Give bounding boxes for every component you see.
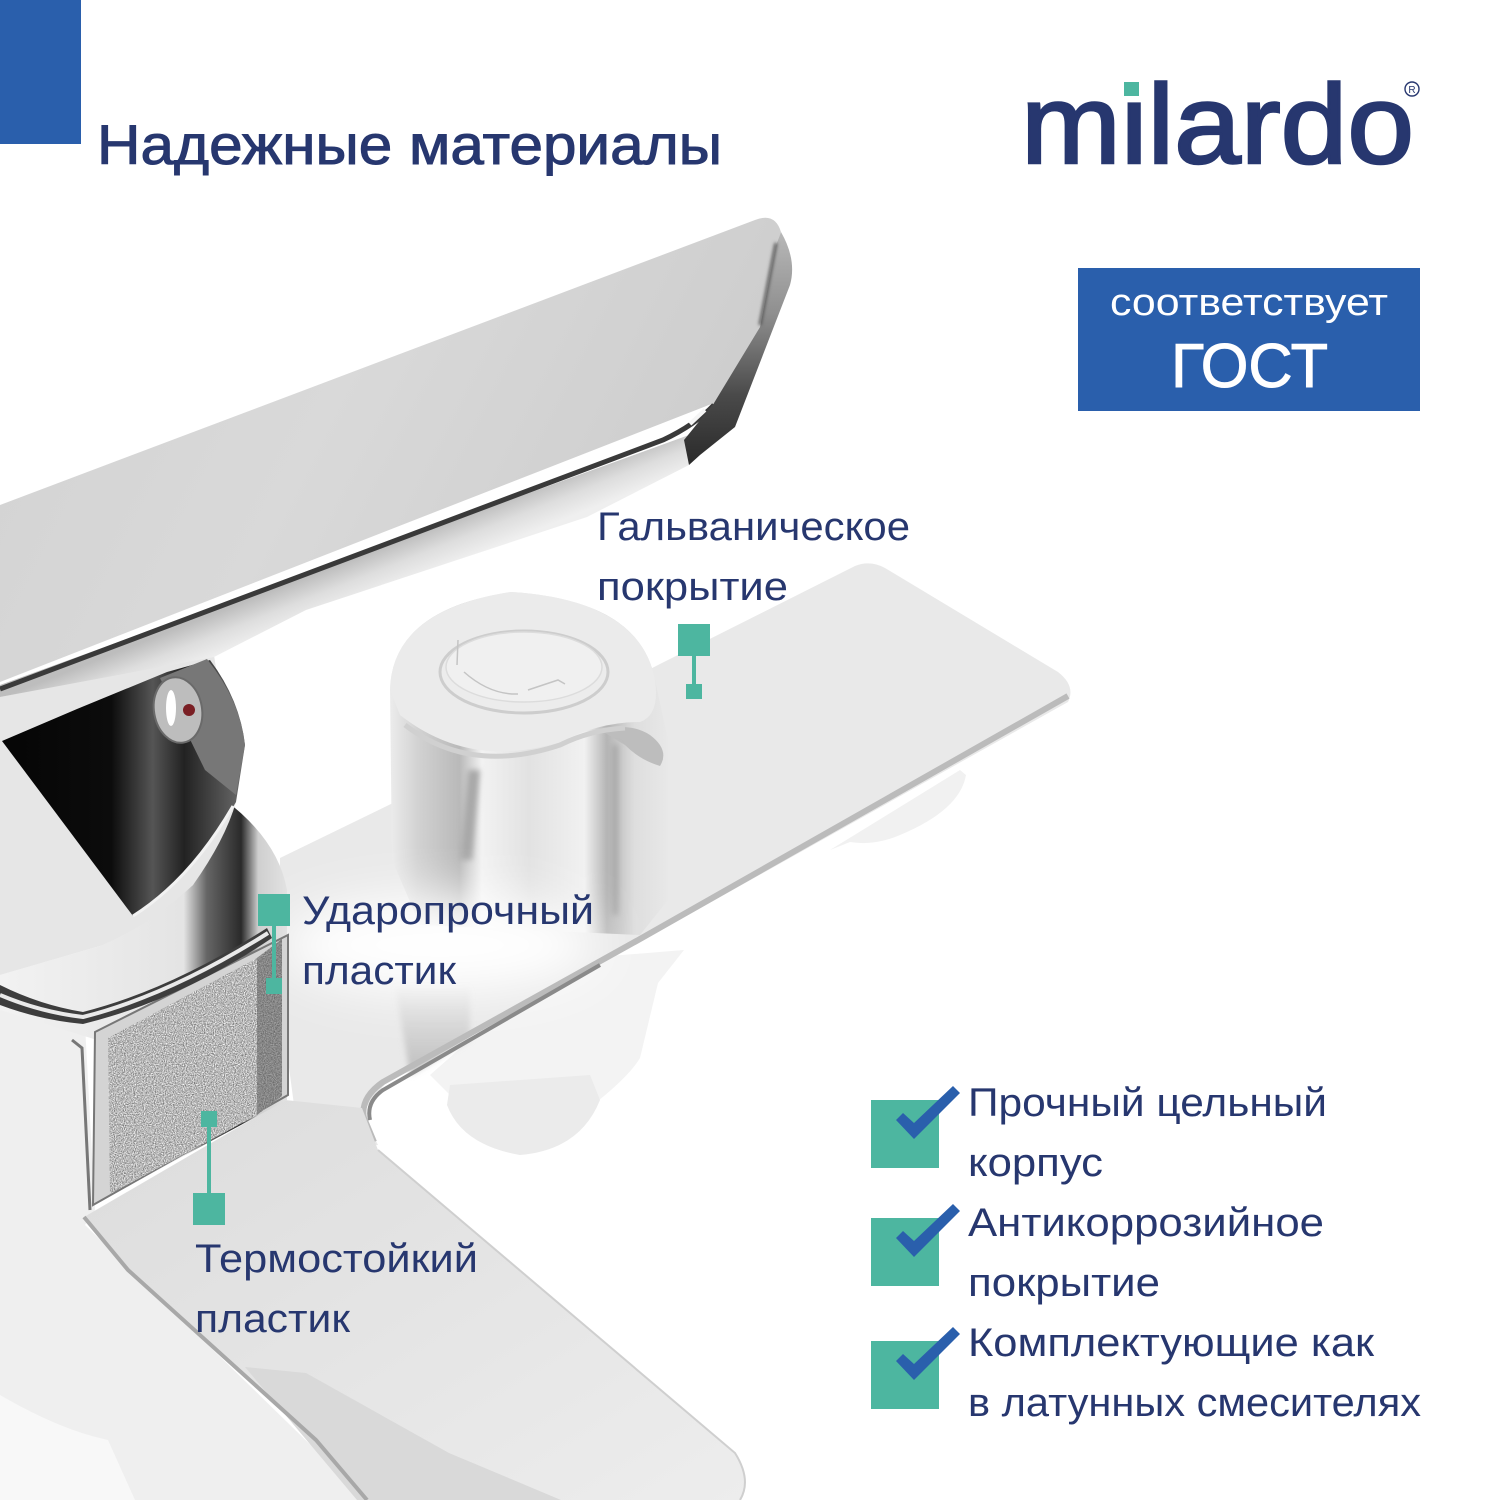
callout: heat-resistant plastic — [193, 1111, 478, 1341]
title: Надежные материалы — [97, 113, 722, 176]
corner accent block — [0, 0, 81, 144]
knob cap markings — [457, 640, 565, 694]
registered mark: R — [1408, 85, 1416, 96]
spout end face — [684, 232, 792, 465]
callout: heat-resistant plastic: Термостойкий — [195, 1237, 478, 1281]
lever skirt left face — [0, 655, 236, 975]
lower valve body — [430, 950, 684, 1155]
lever neck grey — [160, 659, 245, 795]
spout tip highlight — [690, 410, 705, 424]
stem reflection — [395, 985, 470, 1075]
cylinder reflections — [460, 745, 618, 915]
arm chrome lip — [369, 965, 600, 1120]
spout top face — [0, 218, 781, 682]
item: solid body — [871, 1081, 1327, 1185]
marker — [678, 624, 710, 699]
logo wordmark: milardo — [1021, 62, 1414, 187]
rear mounting disc — [830, 770, 966, 850]
callout: galvanic coating — [597, 505, 910, 699]
collar — [0, 800, 287, 1205]
hot water indicator — [149, 673, 207, 747]
item: anti-corrosion — [871, 1201, 1324, 1305]
callout: galvanic coating: покрытие — [597, 565, 788, 609]
chrome ring highlight — [0, 933, 268, 1017]
item: anti-corrosion: Антикоррозийное — [968, 1201, 1324, 1245]
callout: impact-resistant plastic: Ударопрочный — [302, 889, 594, 933]
lever bottom curve — [133, 806, 233, 916]
callout: impact-resistant plastic: пластик — [302, 949, 457, 993]
deck plate shadow — [245, 1367, 561, 1500]
item: anti-corrosion: покрытие — [968, 1261, 1160, 1305]
item: solid body: Прочный цельный — [968, 1081, 1327, 1125]
lever dark reflection — [2, 660, 245, 916]
knob lever nub — [600, 727, 663, 766]
long deck arm — [280, 563, 1070, 1150]
arm front edge — [363, 696, 1068, 1142]
knob cap — [390, 592, 656, 751]
knob cap inner disc — [446, 632, 602, 702]
checklist — [871, 1081, 1421, 1425]
rotary knob — [390, 592, 668, 935]
registered mark — [1405, 82, 1419, 96]
marker — [258, 894, 290, 994]
label glow — [280, 897, 600, 993]
frame left shadow line — [72, 1040, 90, 1210]
lower body highlight — [0, 1395, 135, 1500]
logo — [1021, 62, 1419, 187]
callout: galvanic coating: Гальваническое — [597, 505, 910, 549]
marker — [193, 1111, 225, 1225]
callout: heat-resistant plastic: пластик — [195, 1297, 351, 1341]
spout end dark strip — [760, 243, 776, 325]
cylinder rim — [405, 725, 625, 756]
badge line two: ГОСТ — [1171, 332, 1328, 401]
spout lower band — [0, 435, 689, 697]
chrome ring band — [0, 928, 272, 1024]
badge: GOST — [1078, 268, 1420, 411]
chrome frame — [93, 935, 288, 1205]
front deck plate — [84, 1100, 745, 1500]
knob cap ring — [440, 631, 608, 713]
logo teal dot — [1118, 76, 1144, 100]
faucet photo — [0, 218, 1070, 1500]
callout: impact-resistant plastic — [258, 889, 594, 994]
item: components: в латунных смесителях — [968, 1381, 1421, 1425]
item: components — [871, 1321, 1421, 1425]
item: solid body: корпус — [968, 1141, 1103, 1185]
badge line one: соответствует — [1110, 282, 1388, 324]
lower left body — [0, 1005, 367, 1500]
spout dark line — [0, 405, 714, 689]
panel dark side — [257, 939, 282, 1115]
deck plate edges — [84, 1217, 367, 1500]
textured plastic panel — [108, 939, 282, 1194]
item: components: Комплектующие как — [968, 1321, 1375, 1365]
